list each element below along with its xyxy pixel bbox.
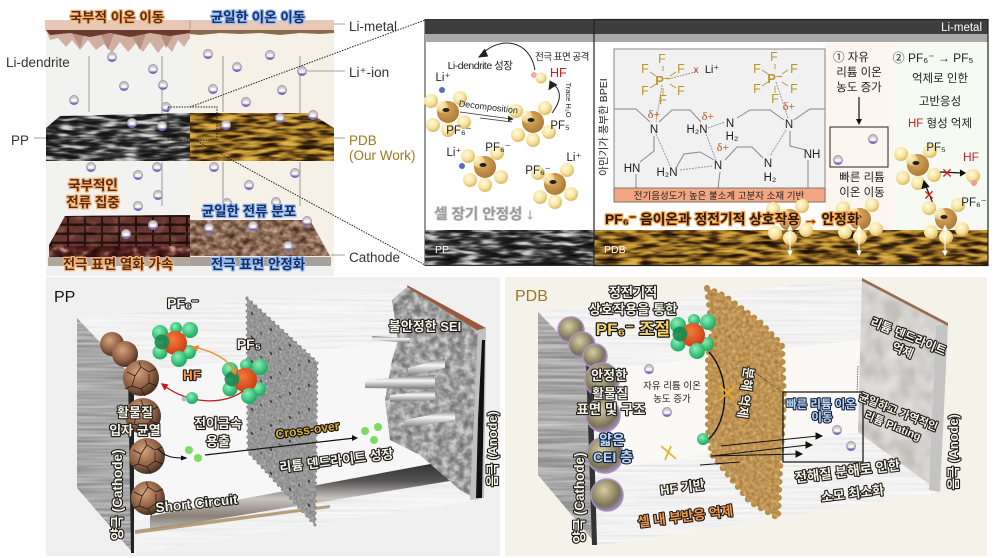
label: dendrite suppression: 리튬 덴드라이트	[868, 315, 948, 358]
zoom box and lines	[168, 20, 425, 265]
curved arrow: HF to dendrite	[479, 43, 535, 70]
PF6 left structure: F	[659, 93, 667, 107]
amine labels: NH	[804, 149, 820, 161]
PF6 left structure: F	[677, 84, 685, 98]
ion transport arrows	[700, 433, 822, 465]
label: electrode attack: 전극 표면 공격	[535, 51, 589, 63]
SEI dendrites	[365, 336, 455, 428]
PF6 molecule	[152, 322, 198, 367]
PF6 left structure: F	[677, 62, 685, 76]
delta plus marks	[648, 99, 795, 154]
HF molecule	[531, 72, 546, 84]
cathode cell blocks	[49, 215, 190, 246]
dotted leaders	[750, 366, 858, 392]
label: cathode: 양극 (Cathode)	[572, 453, 587, 543]
label: PF5: PF₅	[237, 336, 261, 352]
labels: PF6 and PF5: PF₆⁻	[525, 165, 551, 177]
panel: PDB cell	[505, 277, 987, 556]
anode plate	[858, 278, 948, 492]
label: PP: PP	[435, 244, 449, 256]
label: Cross-over: Cross-over	[275, 419, 341, 441]
label: free Li concentration: 농도 증가	[653, 394, 691, 405]
green sphere	[697, 433, 709, 445]
panel background	[505, 277, 987, 556]
label: HF: HF	[550, 66, 567, 80]
label: electrolyte decomposition minimized	[794, 458, 901, 505]
PF6 left structure	[641, 52, 685, 107]
protected particles	[558, 317, 623, 511]
PDB strip	[594, 230, 988, 265]
label: PDB: PDB	[604, 244, 626, 256]
smooth Li deposit	[190, 30, 334, 35]
orange exchange arrow	[193, 346, 236, 374]
fast ion box	[830, 127, 888, 167]
cathode, degraded	[49, 215, 190, 257]
PF6 right structure: F	[770, 50, 778, 64]
label: uniform plating: 리튬 Plating	[862, 409, 923, 443]
red x and Li+: x	[694, 65, 698, 76]
delta plus marks: δ+	[783, 99, 795, 113]
arrow: short hop	[158, 449, 186, 460]
text: free lithium ion concentration: 농도 증가	[836, 81, 882, 94]
vertical label: BPEI: 아민기가 풍부한 BPEI	[598, 78, 610, 176]
text: suppression: 억제로 인한	[912, 72, 968, 85]
label: anode: 음극 (Anode)	[485, 411, 500, 487]
PF5 molecule	[222, 359, 268, 404]
lithium ions	[69, 49, 318, 251]
adsorbed PF6 clusters on PDB	[766, 198, 969, 245]
label: Cathode: Cathode	[349, 250, 400, 265]
PF6 right structure: F	[771, 92, 779, 106]
panel background	[46, 30, 334, 265]
label: particle cracking	[109, 405, 161, 438]
Li ions and labels: Li⁺	[566, 152, 582, 164]
PP separator layer	[46, 113, 190, 161]
floor shadow	[46, 266, 334, 276]
amine labels: N	[726, 118, 734, 130]
cathode, stable	[190, 220, 330, 256]
labels: PF6 and PF5: PF₆⁻	[446, 125, 472, 137]
label: PP: PP	[54, 289, 75, 306]
label: stable active material	[576, 368, 646, 417]
label: HF side reactions: HF 기반	[659, 477, 706, 498]
label: PF6: PF₆⁻	[961, 197, 987, 209]
anode SEI surface	[385, 287, 480, 500]
long dendrite	[135, 460, 456, 534]
heading: electrostatic stabilization: PF₆⁻ 음이온과 정전기적 상호작용 → 안정화	[605, 212, 860, 227]
substrate bar: 전기음성도가 높은 불소계 고분자 소재 기반	[634, 190, 805, 202]
label: thin CEI: 얇은	[599, 432, 625, 448]
label: uniform plating: 균일하고 가역적인	[857, 389, 940, 434]
PF6 right structure: F	[753, 82, 761, 96]
label: particle cracking: 입자 균열	[109, 423, 161, 438]
cracked cathode particles	[100, 332, 165, 516]
delta plus marks: δ+	[702, 109, 714, 123]
arrow: down to fast ion box	[856, 97, 862, 125]
label: transition metal dissolution: 용출	[206, 434, 230, 449]
labels: PF6 and PF5: PF₆⁻	[485, 142, 511, 154]
text: fast lithium ion movement: 이온 이동	[839, 186, 885, 199]
leader lines	[34, 24, 345, 255]
red crosses: ✕	[941, 165, 953, 181]
label: HF: HF	[183, 368, 201, 383]
ion path lines	[89, 56, 300, 206]
Li dendrite deposit	[46, 30, 190, 53]
text: fast lithium ion movement: 빠른 리튬	[839, 171, 885, 184]
label: fast Li ion movement: 빠른 리튬 이온	[786, 398, 856, 411]
text: suppression	[893, 51, 974, 130]
PF6 right structure: F	[790, 82, 798, 96]
HF sphere	[182, 392, 198, 404]
anode rear edge	[407, 285, 486, 362]
Li-metal band	[594, 20, 988, 42]
label: electrostatic control: 상호작용을 통한	[589, 302, 677, 317]
Li-metal bar	[45, 20, 334, 30]
label: PDB: PDB	[515, 288, 548, 305]
panel frame and background	[425, 20, 594, 266]
PF6 molecule left	[424, 91, 471, 137]
substrate bar	[614, 188, 825, 202]
PF6 right structure: P⁻	[767, 71, 783, 86]
labels: PF6 and PF5: PF₅	[550, 120, 570, 132]
PF6 right structure: F	[753, 62, 761, 76]
text: suppression: 고반응성	[919, 95, 961, 108]
amine labels: HN	[624, 163, 640, 175]
text: free lithium ion concentration: 리튬 이온	[836, 66, 882, 79]
label: Li-metal: Li-metal	[941, 22, 982, 34]
anode side plate	[470, 328, 486, 500]
Li ions and labels: Li⁺	[446, 147, 462, 159]
red HF arrow	[162, 384, 243, 401]
delta plus marks: δ+	[717, 140, 729, 154]
text: free lithium ion concentration: ① 자유	[833, 51, 869, 64]
PF6 left structure: F	[658, 52, 666, 66]
dark dendrite tips	[46, 30, 190, 37]
label: fast Li ion movement: 이동	[811, 411, 833, 424]
amine labels	[624, 118, 820, 184]
PF6 molecule	[670, 314, 716, 359]
cathode base plate	[48, 257, 331, 266]
label: uniform plating	[851, 389, 940, 448]
amine labels: N	[764, 158, 772, 170]
label: thin CEI: CEI 층	[593, 449, 633, 465]
label: anode: 음극 (Anode)	[946, 414, 961, 490]
fast ion box	[783, 392, 863, 462]
label: PF5: PF₅	[926, 142, 946, 154]
dotted interactions	[656, 72, 788, 170]
panel: PDB zoom detail	[594, 20, 988, 266]
PDB separator layer	[190, 113, 334, 161]
gold separator	[707, 288, 784, 518]
label: electrostatic control	[589, 285, 677, 339]
box background	[614, 49, 825, 202]
PF6 molecule middle	[461, 146, 508, 192]
label: Li-dendrite: Li-dendrite	[6, 55, 70, 70]
delta plus marks: δ+	[648, 107, 660, 121]
arrow: cross-over	[205, 435, 358, 455]
label: electrolyte decomposition minimized: 전해질 분해로 인한	[794, 458, 901, 485]
red x and Li+	[694, 64, 719, 76]
panel backgrounds	[594, 20, 988, 265]
chemical structure box	[614, 49, 825, 202]
label: transition metal dissolution: 전이금속	[194, 416, 242, 431]
label: decomposition suppression: 분해 억제	[734, 366, 756, 419]
label: Li-dendrite growth: Li-dendrite 성장	[448, 60, 513, 72]
heading: uniform ion movement: 균일한 이온 이동	[211, 10, 305, 25]
label: transition metal dissolution	[194, 416, 242, 449]
dissolved metal spheres	[185, 423, 382, 462]
cathode plate	[538, 312, 597, 545]
panel: PP zoom detail	[424, 20, 594, 266]
panel: ion transport comparison	[6, 10, 425, 276]
PF6 left structure: F	[641, 62, 649, 76]
label: PP: PP	[11, 133, 29, 148]
callout: uniform current: 균일한 전류 분포	[202, 204, 296, 219]
floor and glass plane	[538, 278, 948, 546]
label: Trace H2O: Trace H₂O	[564, 82, 573, 118]
label: electrostatic control: 정전기적	[609, 285, 657, 300]
label: stable active material: 활물질	[592, 386, 628, 401]
HF molecule	[966, 169, 980, 186]
callout: localized current: 전류 집중	[66, 195, 120, 210]
curved arrow: PF5 to HF	[549, 81, 559, 113]
separator PP	[247, 298, 317, 525]
label: electrolyte decomposition minimized: 소모 최소화	[820, 482, 885, 505]
amine labels: H₂	[726, 131, 738, 143]
amine labels: N	[714, 160, 722, 172]
double arrows	[788, 226, 947, 255]
label: PDB: (Our Work)	[349, 148, 416, 163]
PF6 left structure: F	[641, 84, 649, 98]
label: Li+ ion: Li⁺-ion	[349, 65, 389, 80]
amine labels: N	[650, 124, 658, 136]
panel background	[46, 277, 500, 556]
label: HF: HF	[963, 150, 979, 164]
caption: electrode degradation: 전극 표면 열화 가속	[63, 257, 173, 272]
ions	[644, 364, 856, 451]
dendrite facets	[72, 33, 174, 50]
callout: localized current: 국부적인	[68, 178, 118, 193]
polymer bonds	[614, 109, 825, 188]
label: electrostatic control: PF₆⁻ 조절	[596, 320, 670, 339]
label: Decomposition: Decomposition	[458, 98, 519, 116]
text: suppression: HF 형성 억제	[908, 117, 972, 130]
PF6 right structure	[753, 50, 798, 106]
label: Li-metal: Li-metal	[349, 19, 397, 34]
text: suppression: ② PF₆⁻ → PF₅	[893, 51, 974, 65]
red crosses: ✕	[923, 187, 935, 203]
label: PDB: PDB	[349, 133, 377, 148]
PF5 molecule	[509, 101, 556, 147]
text: fast lithium ion movement	[839, 171, 885, 199]
label: stable active material: 표면 및 구조	[576, 402, 646, 417]
callout: localized current	[66, 178, 120, 210]
caption: cell stability decreases: 셀 장기 안정성 ↓	[434, 206, 534, 223]
label: short circuit: Short Circuit	[155, 492, 239, 515]
PF6 right structure: F	[790, 62, 798, 76]
text: free lithium ion concentration	[833, 51, 882, 94]
PF6 molecule lower right	[531, 163, 578, 209]
label: PDB	[349, 133, 416, 163]
label: fast Li ion movement	[786, 398, 856, 424]
heading: localized ion movement: 국부적 이온 이동	[70, 10, 164, 25]
red x and Li+: Li⁺	[705, 64, 719, 76]
panel: PP cell	[46, 277, 500, 556]
PF6 left structure: P⁻	[655, 73, 671, 88]
cathode plate	[77, 318, 134, 553]
label: HF side reactions: 셀 내 부반응 억제	[637, 503, 734, 530]
amine labels: H₂N	[686, 124, 708, 136]
label: dendrite suppression: 억제	[890, 339, 916, 361]
amine labels: H₂N	[656, 167, 678, 179]
Li ions and labels	[435, 72, 582, 174]
labels: PF6 and PF5	[446, 120, 570, 177]
label: cathode: 양극 (Cathode)	[110, 450, 125, 540]
Li ions and labels: Li⁺	[435, 72, 451, 84]
label: thin CEI	[593, 432, 633, 465]
label: dendrite growth: 리튬 덴드라이트 성장	[279, 446, 394, 475]
red crosses	[923, 165, 953, 203]
PF5 molecule	[894, 144, 941, 190]
label: free Li concentration	[643, 381, 701, 405]
label: particle cracking: 활물질	[117, 405, 153, 420]
panel frame	[594, 20, 988, 266]
deflection curve	[708, 352, 725, 440]
label: PF6: PF₆⁻	[167, 295, 199, 311]
Li-metal band	[425, 20, 594, 42]
label: HF side reactions	[637, 477, 734, 530]
label: stable active material: 안정한	[591, 368, 627, 383]
PP strip	[425, 230, 594, 265]
floor and glass plane	[77, 285, 485, 553]
caption: electrode stabilization: 전극 표면 안정화	[211, 257, 306, 272]
amine labels: H₂	[764, 172, 776, 184]
label: free Li concentration: 자유 리튬 이온	[643, 381, 701, 392]
amine labels: N	[785, 119, 793, 131]
decomposition arrows	[460, 112, 513, 122]
blocked arrows	[922, 170, 965, 211]
label: unstable SEI: 불안정한 SEI	[389, 319, 461, 334]
yellow crosses	[661, 386, 735, 460]
